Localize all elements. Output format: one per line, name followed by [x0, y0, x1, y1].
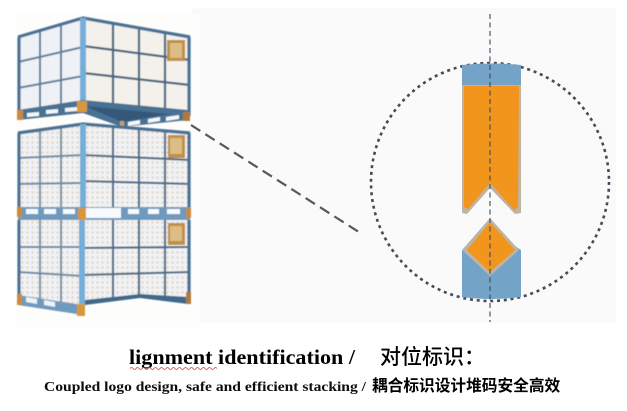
title: lignment identification /: [129, 345, 356, 369]
leader line: [191, 125, 362, 234]
panel: detail background: [192, 8, 616, 323]
title: spell-check underline: [130, 368, 217, 370]
dotted circle: [371, 63, 609, 301]
crate: middle: [17, 124, 191, 221]
shipping label: [167, 40, 185, 61]
vertical centre line: [489, 14, 491, 322]
crate: top: [17, 18, 190, 128]
lower diamond mark: [462, 218, 519, 276]
crate: bottom: [17, 220, 191, 316]
stacked crates illustration: [17, 18, 191, 316]
shipping label: [168, 223, 185, 245]
subtitle: Chinese: 耦合标识设计堆码安全高效: [372, 376, 561, 395]
subtitle: Coupled logo design, safe and efficient stacking /: [44, 379, 366, 394]
pallet: [18, 295, 83, 315]
pallet: [18, 100, 188, 127]
lower blue post: [462, 230, 521, 299]
shipping label: [168, 135, 185, 158]
upper orange arrow mark: [462, 85, 521, 214]
upper blue post: [462, 64, 521, 85]
pallet: [18, 207, 190, 221]
panel: crate photo background: [17, 14, 200, 328]
title: Chinese: 对位标识：: [380, 346, 485, 369]
detail view: alignment marks: [371, 14, 609, 322]
